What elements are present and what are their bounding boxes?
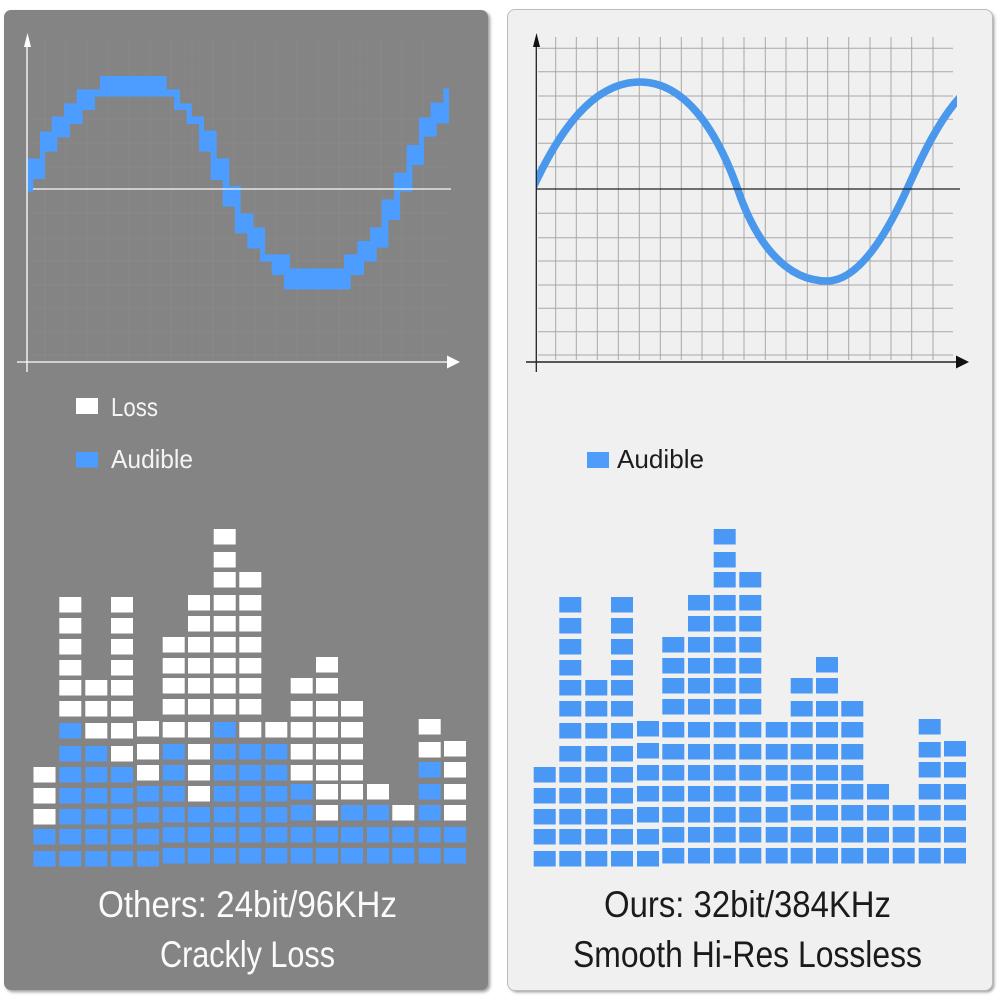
smooth sine wave — [532, 82, 962, 281]
axes — [17, 33, 460, 372]
caption: others — [98, 884, 397, 975]
caption: ours: Ours: 32bit/384KHz — [604, 884, 891, 925]
caption: ours: Smooth Hi-Res Lossless — [573, 934, 922, 975]
legend: audible: Audible — [617, 444, 704, 474]
bar chart: ours, all audible — [534, 529, 966, 866]
caption: others: Others: 24bit/96KHz — [98, 884, 397, 925]
graph grid — [538, 37, 953, 360]
caption: others: Crackly Loss — [160, 934, 335, 975]
faint background grid — [30, 37, 448, 360]
legend: audible — [76, 444, 193, 474]
panel: ours (light) — [508, 10, 992, 990]
axes — [526, 33, 969, 372]
legend: audible: Audible — [111, 444, 193, 474]
legend: loss: Loss — [111, 392, 158, 422]
bar chart: others, loss over audible — [34, 529, 466, 866]
legend: loss — [76, 392, 158, 422]
panel: others (grey) — [4, 10, 488, 990]
stepped waveform — [27, 76, 449, 289]
caption: ours — [573, 884, 922, 975]
